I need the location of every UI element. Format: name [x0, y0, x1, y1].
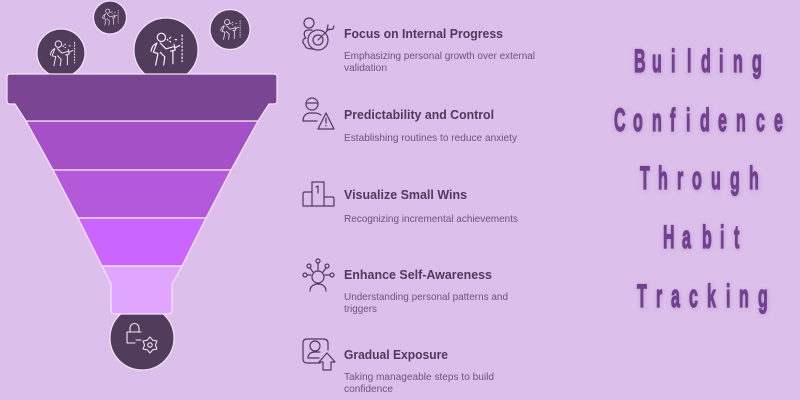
funnel	[7, 74, 277, 314]
description: validation	[344, 62, 387, 74]
funnel band 5 spout	[102, 266, 182, 314]
icon: person with warning	[303, 98, 334, 129]
icon: podium	[303, 182, 334, 206]
funnel top band	[7, 74, 277, 121]
title line: Tracking: Tracking	[637, 279, 768, 315]
item: Focus on Internal Progress	[303, 18, 535, 74]
icon: person with connections	[303, 259, 334, 291]
description: Establishing routines to reduce anxiety	[344, 132, 518, 144]
item: Visualize Small Wins	[303, 182, 518, 225]
item: Predictability and Control	[303, 98, 518, 144]
description: Recognizing incremental achievements	[344, 213, 518, 225]
heading: Enhance Self-Awareness	[344, 267, 492, 282]
title line: Through: Through	[640, 161, 759, 197]
funnel band 3	[53, 170, 231, 218]
description: Emphasizing personal growth over external	[344, 50, 535, 62]
description: Understanding personal patterns and	[344, 291, 508, 303]
description: Taking manageable steps to build	[344, 371, 494, 383]
icon circle: small top hiker	[94, 1, 126, 34]
description: confidence	[344, 383, 393, 395]
title line: Confidence: Confidence	[614, 103, 783, 139]
icon circle: large centre hiker	[134, 18, 198, 82]
icon: profile with up arrow	[303, 339, 335, 370]
heading: Visualize Small Wins	[344, 187, 467, 202]
heading: Focus on Internal Progress	[344, 26, 503, 41]
title line: Habit: Habit	[663, 220, 740, 256]
item: Enhance Self-Awareness	[303, 259, 508, 315]
heading: Predictability and Control	[344, 107, 494, 122]
icon circle: right hiker	[210, 10, 250, 50]
description: triggers	[344, 303, 377, 315]
icon circle: lock and gear	[110, 306, 174, 370]
heading: Gradual Exposure	[344, 347, 448, 362]
icon circle: left hiker	[37, 29, 85, 77]
item: Gradual Exposure	[303, 339, 494, 395]
icon: person with target	[303, 18, 334, 50]
funnel band 4	[78, 218, 206, 266]
title line: Building: Building	[634, 44, 762, 80]
title	[614, 44, 783, 315]
funnel band 2	[26, 121, 258, 170]
